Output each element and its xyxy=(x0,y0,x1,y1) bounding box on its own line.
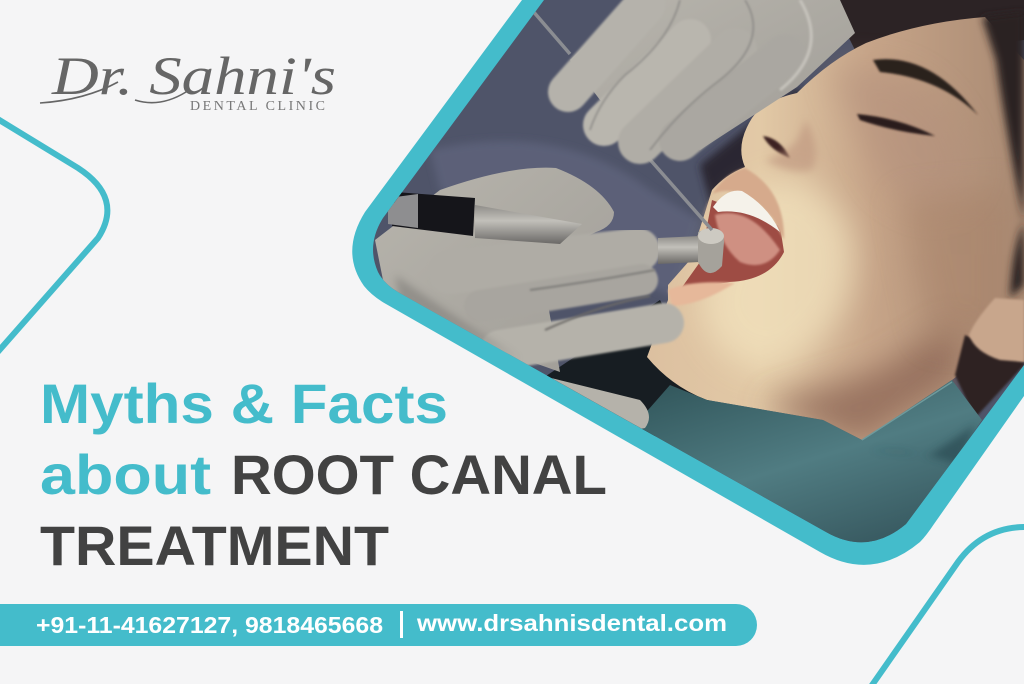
upper lip xyxy=(702,168,784,240)
separator xyxy=(400,611,403,638)
title line 2: ROOT CANAL xyxy=(231,443,607,506)
lower hand with little finger xyxy=(375,168,664,429)
scrubs backdrop xyxy=(350,0,1024,570)
dental probe xyxy=(532,10,712,230)
title line 2 xyxy=(40,443,607,506)
nostril xyxy=(763,136,790,158)
title line 3: TREATMENT xyxy=(40,514,389,577)
lower lip xyxy=(668,282,735,306)
face and neck xyxy=(647,17,1024,445)
logo subtitle: DENTAL CLINIC xyxy=(190,99,325,114)
logo xyxy=(40,46,336,114)
website: www.drsahnisdental.com xyxy=(416,610,727,636)
hair xyxy=(982,12,1024,298)
teeth xyxy=(713,191,780,232)
decorative curve bottom right xyxy=(870,527,1024,684)
logo flourish xyxy=(40,82,186,103)
closed eye xyxy=(857,114,935,136)
gown xyxy=(634,380,982,560)
eyebrow xyxy=(873,59,978,115)
decorative curve left xyxy=(0,118,107,354)
top gloved hand xyxy=(568,0,855,150)
nose shading xyxy=(765,120,816,171)
handpiece drill xyxy=(388,192,724,273)
title line 1: Myths & Facts xyxy=(40,372,448,435)
mouth interior xyxy=(680,200,784,290)
ear xyxy=(969,298,1024,362)
phone numbers: +91-11-41627127, 9818465668 xyxy=(36,612,383,638)
photo: dentist treating patient xyxy=(350,0,1024,570)
title line 2: about xyxy=(40,443,211,506)
contact bar xyxy=(0,604,757,646)
photo frame xyxy=(352,0,1024,565)
logo signature: Dr. Sahni's xyxy=(51,46,336,106)
title xyxy=(40,372,607,577)
